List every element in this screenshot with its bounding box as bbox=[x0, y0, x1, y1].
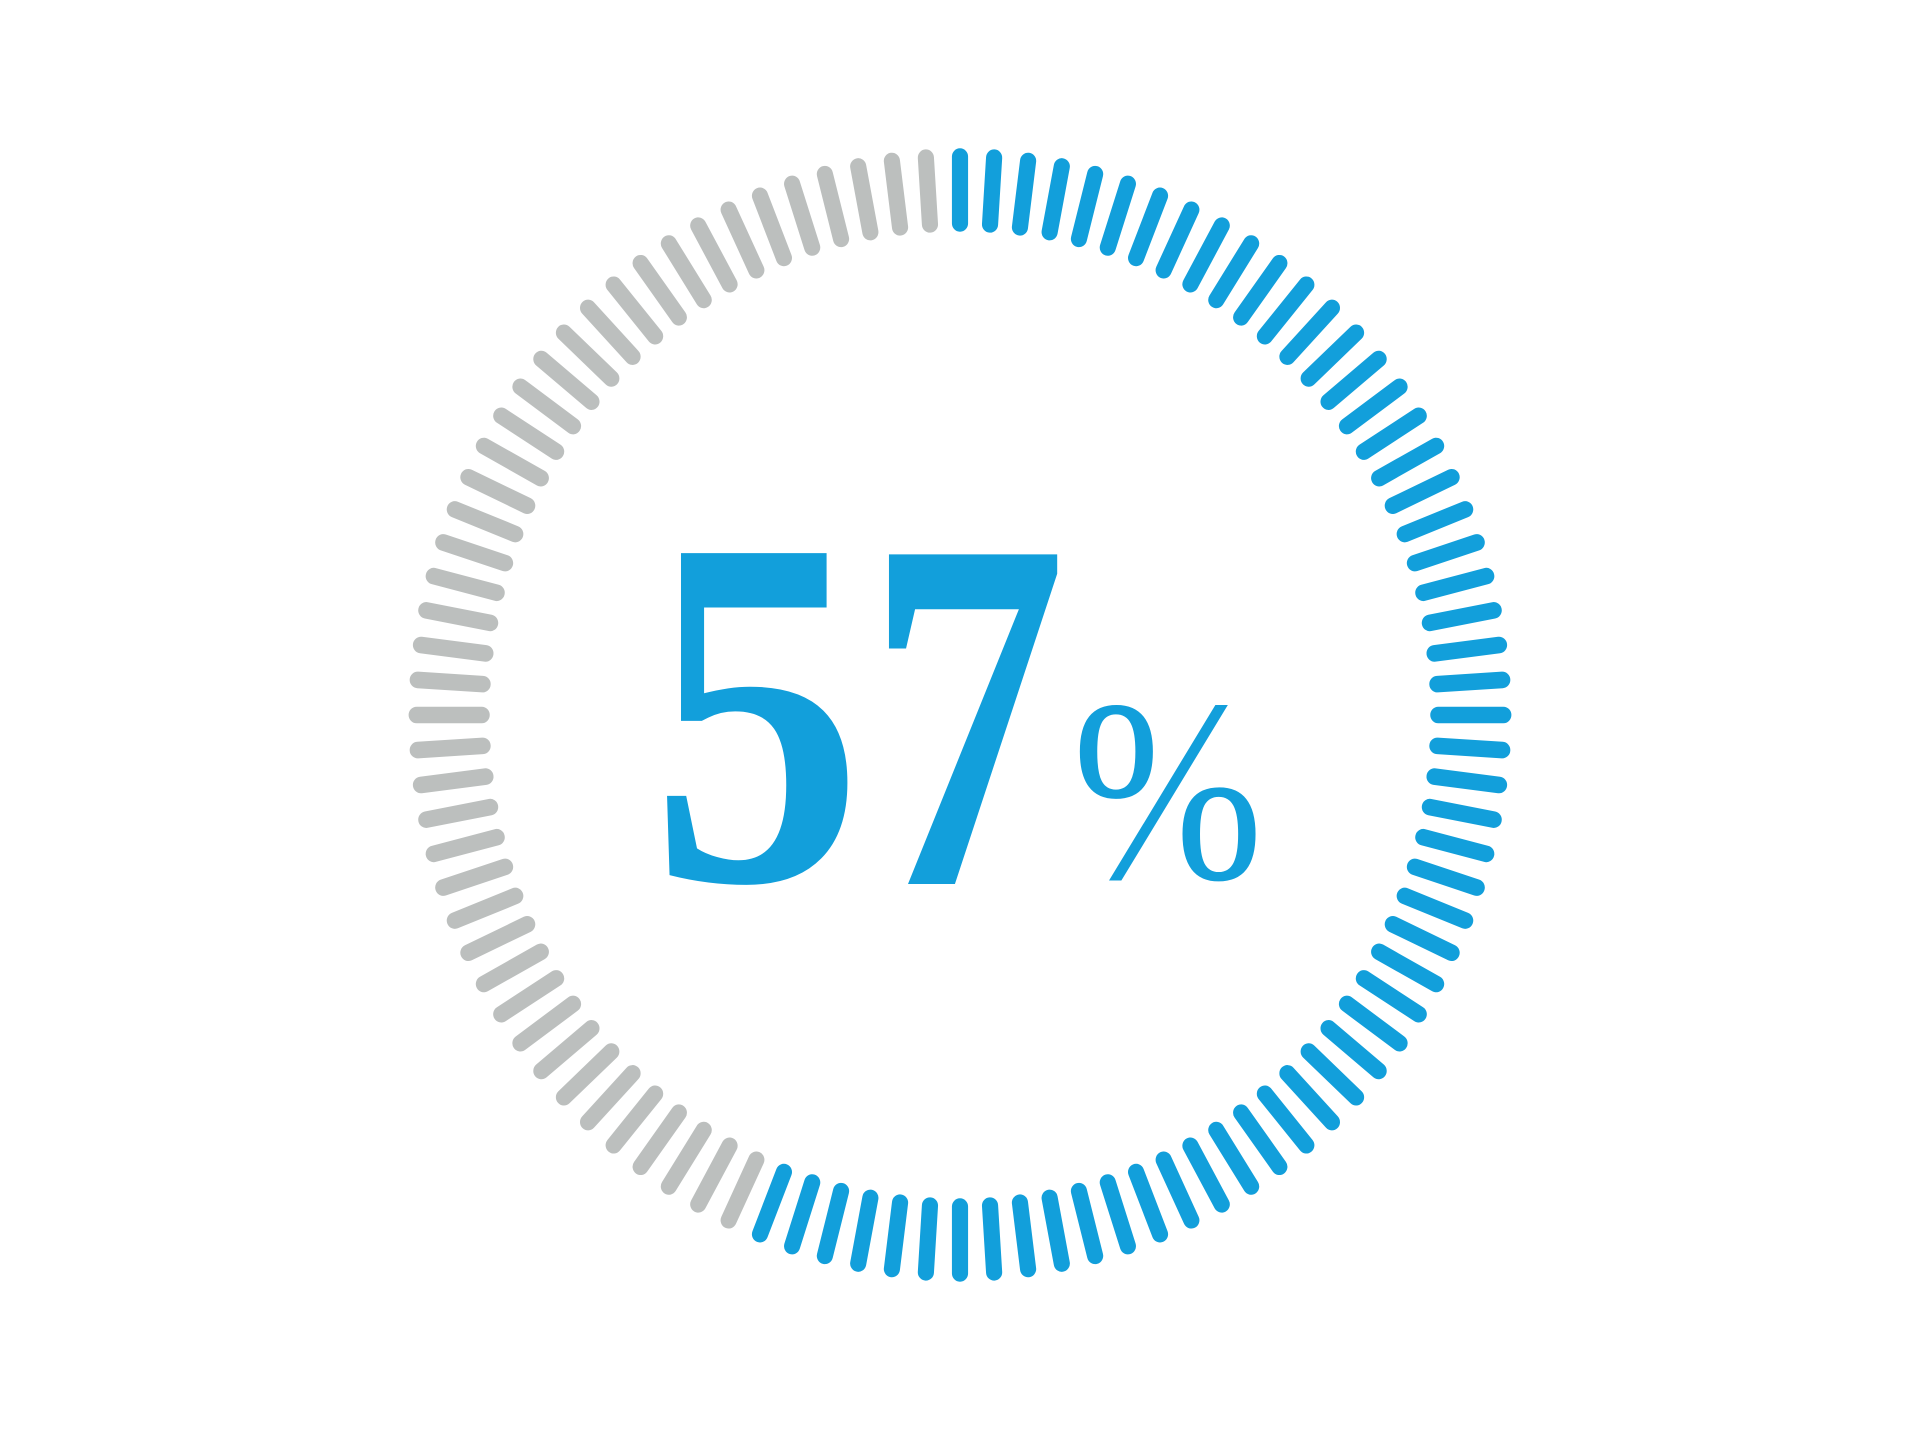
digit 5: 5 bbox=[650, 436, 863, 989]
remaining ring: 43 grey ticks bbox=[340, 70, 982, 1231]
progress ring: 57 blue ticks bbox=[749, 148, 1580, 1360]
percent sign: % bbox=[1072, 647, 1263, 935]
digit 7: 7 bbox=[866, 435, 1067, 993]
percentage value: 57% bbox=[650, 435, 1263, 993]
